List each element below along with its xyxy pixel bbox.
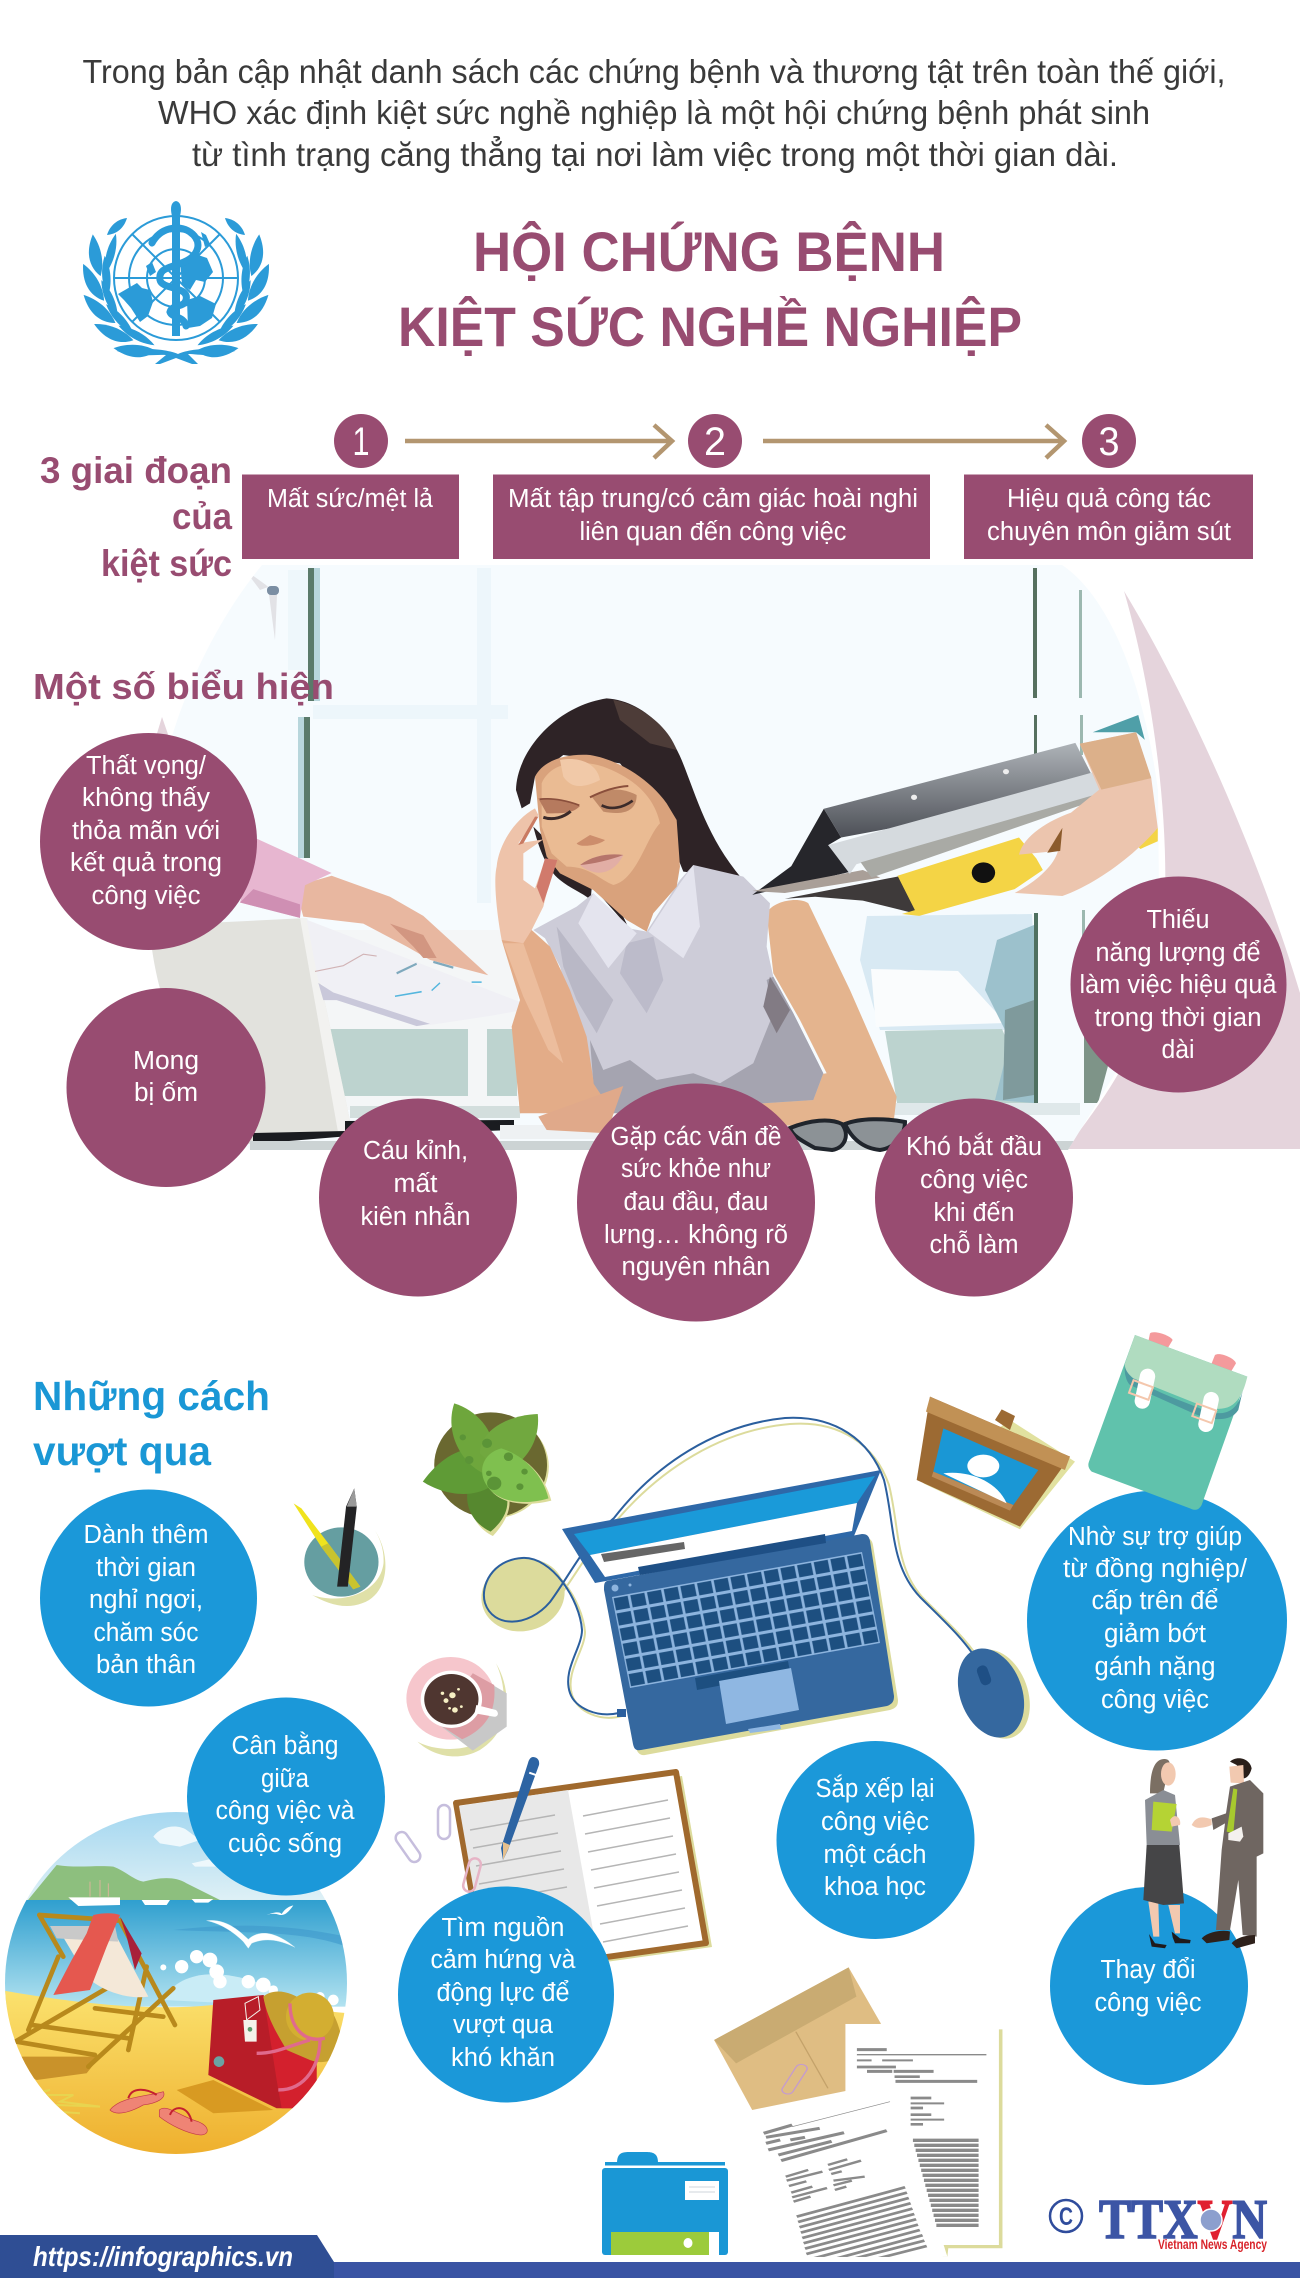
overcome: change job: công việc [1094,1989,1202,2017]
icon: envelope and documents [714,1967,1002,2262]
stage 1 circle: 1 [352,420,370,464]
overcome: work life balance: cuộc sống [228,1830,342,1858]
icon: green satchel [1088,1332,1247,1510]
beach chair [7,1915,175,2067]
symptom: lack of energy: dài [1162,1036,1194,1064]
icon: open notebook with pen [456,1757,712,1978]
footer bar: https://infographics.vn [33,2241,293,2272]
symptom: disappointment: không thấy [82,784,210,812]
symptom: irritable [319,1098,517,1296]
overcome: ask for help: Nhờ sự trợ giúp [1068,1523,1242,1551]
icon: WHO emblem [81,201,271,367]
symptom: health problems: nguyên nhân [622,1253,770,1281]
symptom: disappointment: Thất vọng/ [86,752,207,780]
symptom: wish to be sick: bị ốm [134,1079,198,1107]
small pink tip [155,717,170,740]
arrow: stage 1 to 2 [405,425,672,458]
symptom: wish to be sick [66,988,266,1187]
icon: paper clips [393,1805,482,1893]
intro text: từ tình trạng căng thẳng tại nơi làm việc trong một thời gian dài. [192,136,1118,173]
overcome: ask for help: gánh nặng [1094,1653,1216,1681]
heading: 3 stages: kiệt sức [101,543,232,584]
binder held out [752,715,1158,916]
symptom: lack of energy: Thiếu [1146,906,1210,934]
symptom: health problems: đau đầu, đau [624,1188,768,1216]
overcome: organise work: công việc [821,1808,929,1836]
icon: two business people [1143,1758,1263,1948]
stage 2 box [493,474,930,559]
left arm with pink sleeve [240,839,488,975]
stage 2 box: liên quan đến công việc [580,518,847,546]
overcome: work life balance: công việc và [216,1797,355,1825]
overcome: find motivation: khó khăn [451,2044,555,2072]
icon: picture frame [917,1397,1075,1529]
overcome: rest and self care: bản thân [96,1651,196,1679]
collar [578,893,637,968]
title: HỘI CHỨNG BỆNH [473,220,945,283]
seagull [207,1920,295,1948]
woman holding her head [495,698,897,1133]
stage 2 box: Mất tập trung/có cảm giác hoài nghi [508,485,918,513]
overcome: organise work: Sắp xếp lại [816,1774,934,1803]
straw hat [263,1992,343,2062]
icon: mouse cable [473,1418,982,1718]
symptom: health problems [577,1084,815,1322]
overcome: rest and self care: thời gian [96,1554,196,1582]
symptom: health problems: Gặp các vấn đề [610,1123,782,1151]
heading: 3 stages: 3 giai đoạn [40,450,232,491]
heading: 3 stages [40,450,232,584]
footer bar [0,2235,1300,2278]
symptom: hard to start work: chỗ làm [930,1230,1018,1259]
symptom: hard to start work: Khó bắt đầu [906,1132,1042,1161]
symptom: lack of energy: năng lượng để [1096,939,1260,967]
laptop screen back on desk [150,918,352,1145]
neck and face [535,755,680,932]
symptom: lack of energy: làm việc hiệu quả [1080,971,1277,999]
symptom: disappointment [40,733,257,950]
overcome: organise work [776,1741,974,1939]
overcome: rest and self care [40,1490,257,1706]
heading: symptoms: Một số biểu hiện [33,666,334,707]
intro text [82,53,1226,173]
document on desk [307,920,535,1026]
logo: copyright mark [1050,2200,1082,2232]
stage 3 box [964,474,1253,559]
symptom: hard to start work: khi đến [934,1199,1014,1227]
icon: potted plant [423,1403,551,1536]
office window background [140,560,1170,1160]
logo: TTXVN news agency: TTXVN [1099,2189,1267,2251]
symptom: disappointment: kết quả trong [70,849,222,877]
stage 1 circle [334,414,388,468]
icon: pencil cup [294,1488,385,1606]
overcome: organise work: khoa học [824,1873,926,1901]
title: KIỆT SỨC NGHỀ NGHIỆP [398,295,1022,358]
heading: ways to overcome: vượt qua [33,1428,212,1474]
icon: coffee cup [406,1657,507,1756]
title [398,220,1022,358]
overcome: organise work: một cách [824,1841,926,1869]
icon: laptop [562,1470,898,1755]
symptom: lack of energy: trong thời gian [1094,1004,1262,1032]
intro text: WHO xác định kiệt sức nghề nghiệp là một hội chứng bệnh phát sinh [158,94,1150,131]
heading: ways to overcome [33,1373,270,1474]
left forearm and hand [502,930,595,1113]
blouse [533,865,823,1113]
stage 3 circle: 3 [1098,420,1120,464]
overcome: work life balance [187,1698,385,1896]
overcome: find motivation [398,1886,614,2102]
stage 3 circle [1082,414,1136,468]
intro text: Trong bản cập nhật danh sách các chứng bệnh và thương tật trên toàn thế giới, [82,53,1226,90]
heading: 3 stages: của [172,496,232,537]
symptom: wish to be sick: Mong [133,1047,199,1075]
logo: copyright mark: C [1059,2203,1073,2231]
stage 1 box [242,474,459,559]
overcome: ask for help [1027,1490,1287,1750]
symptom: irritable: kiên nhẫn [360,1202,470,1231]
hair [516,698,742,878]
heading: ways to overcome: Những cách [33,1373,270,1419]
overcome: find motivation: động lực để [436,1979,570,2007]
panel: symptom photo illustration [140,560,1300,1160]
overcome: find motivation: vượt qua [453,2011,554,2039]
pink curved shape behind photo [1067,591,1300,1149]
icon: blue folder [602,2152,728,2255]
icon: beach scene [0,1810,353,2160]
symptom: irritable: Cáu kỉnh, [363,1137,468,1165]
overcome: ask for help: từ đồng nghiệp/ [1063,1555,1248,1583]
overcome: change job [1050,1887,1248,2085]
icon: computer mouse [946,1637,1042,1750]
overcome: change job: Thay đổi [1100,1956,1196,1984]
logo: TTXVN news agency: Vietnam News Agency [1158,2237,1267,2252]
man figure [1230,1758,1252,1778]
overcome: find motivation: cảm hứng và [430,1946,576,1974]
overcome: rest and self care: Dành thêm [84,1521,208,1549]
symptom: lack of energy [1070,876,1286,1092]
overcome: work life balance: Cân bằng [232,1731,338,1760]
stage 2 circle [688,414,742,468]
symptom: irritable: mất [394,1170,438,1198]
stage 1 box: Mất sức/mệt lả [267,485,434,513]
overcome: rest and self care: chăm sóc [94,1619,199,1647]
red suitcase [208,1995,317,2108]
overcome: ask for help: cấp trên để [1092,1587,1218,1615]
flip-flops [110,2092,207,2135]
overcome: work life balance: giữa [261,1765,310,1793]
symptom: health problems: lưng… không rõ [604,1221,788,1249]
symptom: hard to start work: công việc [920,1166,1028,1194]
overcome: rest and self care: nghỉ ngơi, [89,1586,203,1614]
stage 2 circle: 2 [704,420,726,464]
stage 3 box: chuyên môn giảm sút [987,518,1231,546]
overcome: ask for help: công việc [1101,1686,1209,1714]
symptom: disappointment: công việc [92,882,201,910]
woman figure [1150,1759,1170,1793]
symptom: hard to start work [875,1098,1073,1296]
stage 3 box: Hiệu quả công tác [1007,485,1211,513]
hand holding binder [1015,732,1158,896]
symptom: disappointment: thỏa mãn với [72,817,220,845]
overcome: find motivation: Tìm nguồn [442,1914,564,1942]
arrow: stage 2 to 3 [763,425,1064,458]
right arm [620,900,897,1127]
symptom: health problems: sức khỏe như [621,1155,771,1183]
overcome: ask for help: giảm bớt [1104,1620,1206,1648]
eyeglasses [790,1119,905,1150]
